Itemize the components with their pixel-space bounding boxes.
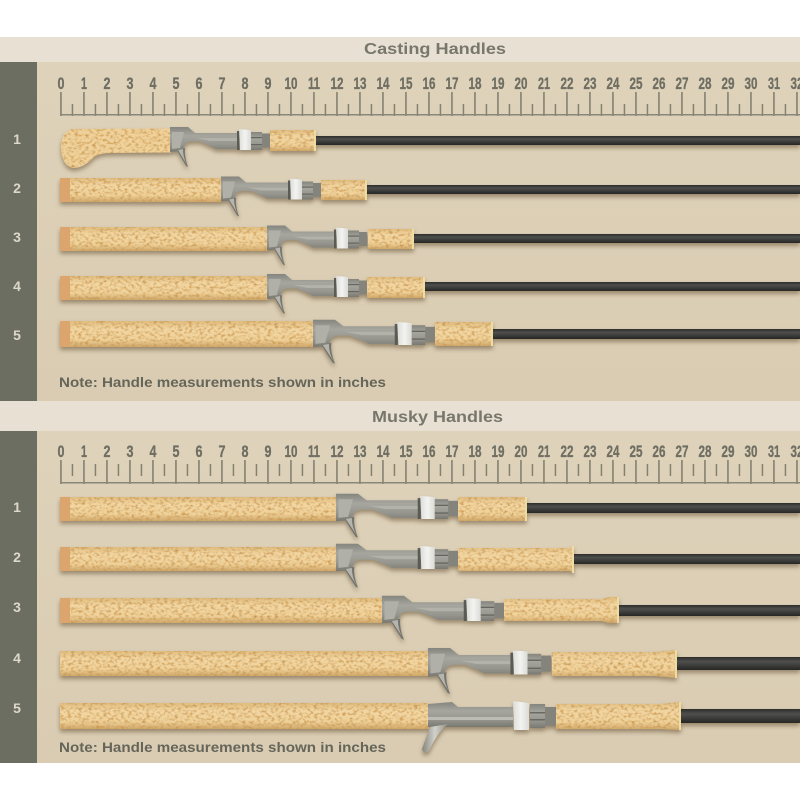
ruler: casting handles: 18 (468, 75, 482, 93)
heading: Musky Handles: Musky Handles (372, 409, 503, 426)
ruler: musky handles: 26 (652, 443, 666, 461)
row label: musky 3: 3 (13, 599, 21, 615)
ruler: casting handles: 6 (196, 75, 202, 93)
ruler: casting handles: 19 (492, 75, 504, 93)
handle: casting 2 (60, 176, 800, 216)
heading: Casting Handles: Casting Handles (364, 41, 506, 58)
ruler: casting handles: 0 (58, 75, 64, 93)
ruler: musky handles: 25 (630, 443, 642, 461)
row label: casting 5: 5 (13, 327, 21, 343)
ruler: musky handles: 10 (284, 443, 298, 461)
ruler: musky handles: 24 (606, 443, 620, 461)
ruler: casting handles: 29 (722, 75, 734, 93)
ruler: musky handles: 7 (218, 443, 226, 461)
ruler: musky handles: 4 (150, 443, 157, 461)
row label: casting 2: 2 (13, 180, 21, 196)
ruler: musky handles: 1 (81, 443, 87, 461)
ruler: casting handles: 2 (104, 75, 110, 93)
ruler: musky handles: 13 (354, 443, 366, 461)
handle: musky 1 (60, 494, 800, 538)
handle: musky 2 (60, 544, 800, 588)
panel: casting handles (0, 37, 800, 401)
row label: musky 2: 2 (13, 549, 21, 565)
ruler: musky handles: 0 (58, 443, 64, 461)
ruler: casting handles: 17 (446, 75, 458, 93)
ruler: casting handles: 15 (400, 75, 412, 93)
row number column (0, 431, 37, 763)
handle: casting 5 (60, 320, 800, 364)
row label: casting 1: 1 (13, 131, 21, 147)
handle: musky 3 (60, 596, 800, 640)
heading band: casting handles (0, 37, 800, 62)
ruler: casting handles: 13 (354, 75, 366, 93)
row label: musky 1: 1 (13, 499, 21, 515)
heading band: musky handles (0, 401, 800, 431)
ruler: musky handles: 12 (330, 443, 344, 461)
ruler: musky handles: 5 (172, 443, 180, 461)
ruler: casting handles: 28 (698, 75, 712, 93)
ruler: musky handles: 19 (492, 443, 504, 461)
handle: casting 3 (60, 226, 800, 266)
row label: casting 3: 3 (13, 229, 21, 245)
panel: musky handles (0, 401, 800, 763)
ruler: casting handles: 26 (652, 75, 666, 93)
ruler: casting handles: 11 (308, 75, 320, 93)
ruler: musky handles: 20 (514, 443, 528, 461)
note: musky measurements: Note: Handle measurements shown in inches (59, 739, 386, 755)
handle: casting 4 (60, 274, 800, 314)
ruler: musky handles: 29 (722, 443, 734, 461)
ruler: casting handles: 9 (264, 75, 272, 93)
ruler: casting handles: 30 (744, 75, 758, 93)
ruler: musky handles: 9 (264, 443, 272, 461)
ruler: casting handles: 1 (81, 75, 87, 93)
ruler: musky handles: 31 (768, 443, 780, 461)
ruler: musky handles: 17 (446, 443, 458, 461)
ruler: casting handles: 4 (150, 75, 157, 93)
ruler: casting handles: 3 (126, 75, 134, 93)
handle: musky 4 (60, 648, 800, 694)
ruler: musky handles: 14 (376, 443, 390, 461)
ruler: musky handles: 3 (126, 443, 134, 461)
ruler: casting handles: 22 (560, 75, 574, 93)
ruler: casting handles: 12 (330, 75, 344, 93)
row number column (0, 62, 37, 401)
ruler: casting handles: 8 (242, 75, 248, 93)
ruler: casting handles: 21 (538, 75, 550, 93)
row label: musky 5: 5 (13, 700, 21, 716)
ruler: casting handles: 27 (676, 75, 688, 93)
ruler: musky handles: 27 (676, 443, 688, 461)
ruler: musky handles: 8 (242, 443, 248, 461)
ruler: musky handles: 23 (584, 443, 596, 461)
ruler: musky handles (58, 443, 800, 484)
row label: musky 4: 4 (13, 650, 21, 666)
ruler: musky handles: 21 (538, 443, 550, 461)
ruler: casting handles: 7 (218, 75, 226, 93)
ruler: casting handles: 5 (172, 75, 180, 93)
ruler: casting handles: 25 (630, 75, 642, 93)
note: casting measurements: Note: Handle measurements shown in inches (59, 374, 386, 390)
handle: musky 5 (60, 701, 800, 753)
ruler: musky handles: 28 (698, 443, 712, 461)
row label: casting 4: 4 (13, 278, 21, 294)
ruler: musky handles: 22 (560, 443, 574, 461)
ruler: casting handles: 16 (422, 75, 436, 93)
ruler: musky handles: 11 (308, 443, 320, 461)
handle: casting 1 (61, 127, 800, 168)
reel seat with long trigger (422, 701, 556, 753)
ruler: musky handles: 16 (422, 443, 436, 461)
ruler: casting handles: 23 (584, 75, 596, 93)
ruler: casting handles: 31 (768, 75, 780, 93)
ruler: musky handles: 18 (468, 443, 482, 461)
ruler: musky handles: 30 (744, 443, 758, 461)
ruler: casting handles (58, 75, 800, 116)
ruler: casting handles: 14 (376, 75, 390, 93)
ruler: musky handles: 15 (400, 443, 412, 461)
ruler: musky handles: 2 (104, 443, 110, 461)
ruler: casting handles: 20 (514, 75, 528, 93)
ruler: casting handles: 24 (606, 75, 620, 93)
ruler: casting handles: 10 (284, 75, 298, 93)
ruler: musky handles: 6 (196, 443, 202, 461)
